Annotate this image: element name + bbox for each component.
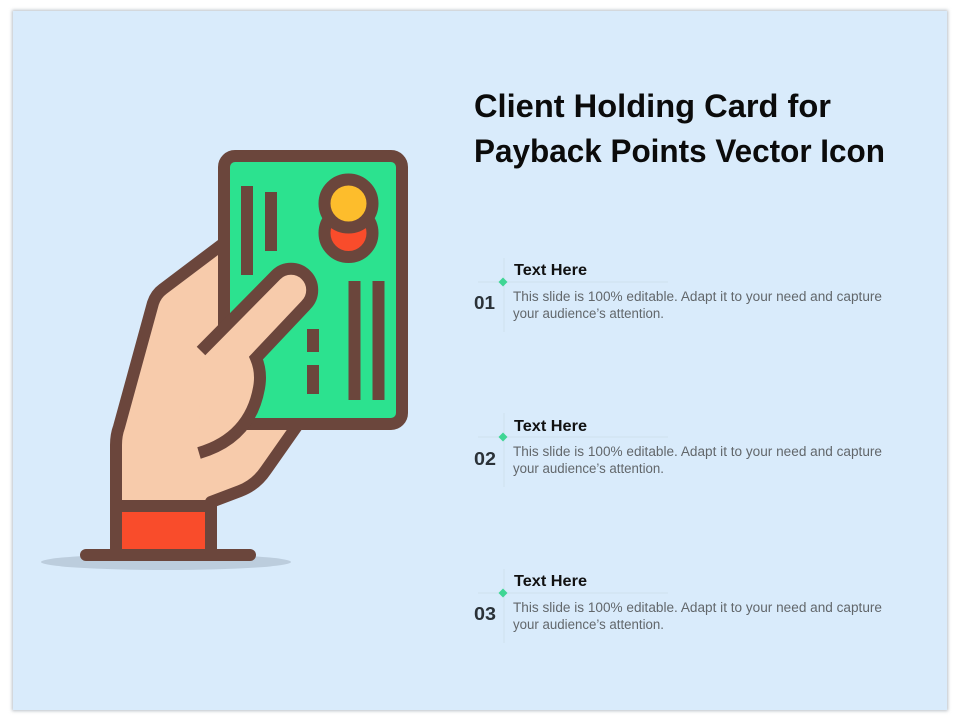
red cuff <box>116 506 211 555</box>
item 01: your audience’s attention. <box>513 306 664 321</box>
item 02: This slide is 100% editable. Adapt it to your need and capture <box>513 444 882 459</box>
item 01 <box>474 258 882 332</box>
base line <box>80 549 256 561</box>
item 01: Text Here <box>514 262 587 279</box>
credit card <box>224 156 402 424</box>
item 03: 03 <box>474 604 496 624</box>
back of hand <box>116 243 299 506</box>
item 03: Text Here <box>514 573 587 590</box>
icon: hand holding card <box>41 156 402 570</box>
item 03: your audience’s attention. <box>513 617 664 632</box>
item 02: 02 <box>474 449 496 469</box>
item 01: This slide is 100% editable. Adapt it to your need and capture <box>513 289 882 304</box>
title <box>474 88 885 169</box>
ground shadow <box>41 554 291 570</box>
item 01: 01 <box>474 293 495 313</box>
item 03: This slide is 100% editable. Adapt it to your need and capture <box>513 600 882 615</box>
title: Client Holding Card for <box>474 88 831 124</box>
item 02: Text Here <box>514 418 587 435</box>
title: Payback Points Vector Icon <box>474 133 885 169</box>
item 02 <box>474 413 882 487</box>
thumb over card <box>199 269 312 453</box>
item 02: your audience’s attention. <box>513 461 664 476</box>
item 03 <box>474 569 882 643</box>
